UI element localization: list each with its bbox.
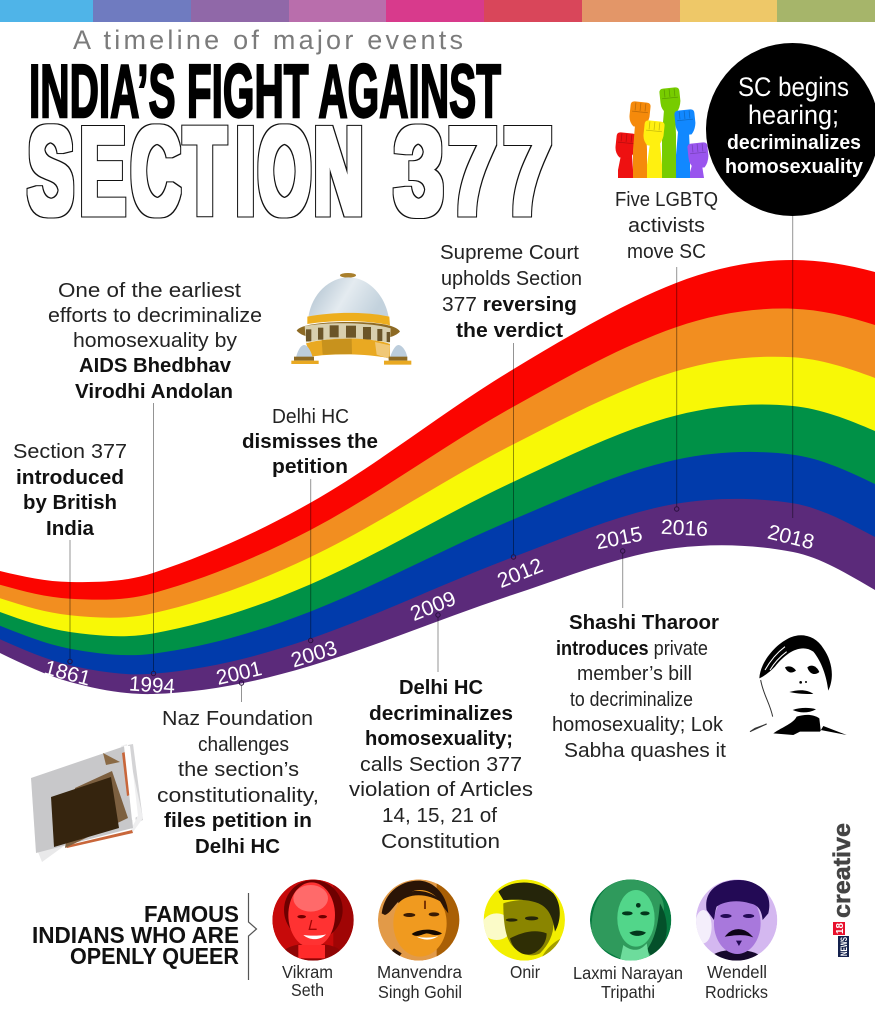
year labels — [42, 516, 816, 699]
event 1861 text: Section 377 — [13, 441, 127, 463]
name: Vikram Seth: Seth — [291, 980, 324, 1000]
year labels: 2016 — [660, 516, 709, 541]
event 2015 text: to decriminalize — [570, 689, 693, 711]
event 2009 text — [349, 677, 533, 853]
event 1861 text — [13, 441, 127, 540]
event 2001 text: files petition in — [164, 810, 312, 832]
event 2001 text: Naz Foundation — [162, 708, 313, 730]
name: Vikram Seth: Vikram — [282, 962, 333, 982]
event 2009 text: calls Section 377 — [360, 754, 522, 776]
portrait: Laxmi Narayan Tripathi — [590, 879, 671, 961]
portrait: Manvendra Singh Gohil — [378, 877, 463, 963]
icon: stack of petition papers — [31, 744, 143, 862]
event 2016 text — [615, 189, 718, 263]
event 2015 text: homosexuality; Lok — [552, 714, 724, 736]
year labels: 2018 — [765, 521, 816, 554]
event 2003 text — [242, 406, 378, 478]
year labels: 1994 — [128, 672, 176, 699]
title: 377 — [394, 102, 553, 240]
event 2015 text: Sabha quashes it — [564, 740, 726, 762]
event 2001 text: Delhi HC — [195, 836, 280, 858]
logo: News18 Creative: NEWS — [839, 937, 849, 956]
event 2012 text: Supreme Court — [440, 242, 579, 264]
event 1861 text: India — [46, 518, 95, 540]
event 2012 text: upholds Section — [441, 268, 582, 290]
year labels: 2001 — [214, 657, 264, 690]
event 1994 text: Virodhi Andolan — [75, 381, 233, 403]
portrait: Onir — [482, 879, 565, 961]
subtitle: A timeline of major events — [73, 25, 463, 55]
event 2012 text: 377 reversing — [442, 294, 577, 316]
rainbow timeline wave — [0, 260, 875, 700]
heading: famous Indians: OPENLY QUEER — [70, 943, 239, 969]
event 2016 text: activists — [628, 215, 705, 237]
event 2018 black circle callout — [706, 43, 875, 216]
event 2015 text: Shashi Tharoor — [569, 612, 719, 634]
event 1994 text: efforts to decriminalize — [48, 305, 262, 327]
title: SECTION — [28, 102, 363, 241]
logo: News18 Creative — [829, 823, 856, 957]
name: Laxmi Narayan Tripathi: Tripathi — [601, 982, 655, 1002]
event 2001 text: challenges — [198, 734, 289, 756]
event 1994 text: One of the earliest — [58, 280, 241, 302]
icon: Supreme Court dome — [291, 273, 411, 365]
event 1994 text: homosexuality by — [73, 330, 237, 352]
year labels: 1861 — [42, 656, 93, 691]
event 2018 black circle callout: hearing; — [748, 100, 839, 130]
name: Laxmi Narayan Tripathi: Laxmi Narayan — [573, 963, 683, 983]
name: Onir: Onir — [510, 962, 540, 982]
event 2009 text: 14, 15, 21 of — [382, 805, 497, 827]
event 2009 text: decriminalizes — [369, 703, 513, 725]
event 2001 text: constitutionality, — [157, 785, 319, 807]
connector lines and dots — [68, 216, 793, 702]
bracket arrow — [248, 893, 256, 980]
name: Laxmi Narayan Tripathi — [573, 963, 683, 1002]
year labels: 2015 — [594, 523, 644, 554]
event 1994 text: AIDS Bhedbhav — [79, 355, 232, 377]
portrait: Wendell Rodricks — [695, 879, 777, 961]
event 2009 text: Constitution — [381, 831, 500, 853]
event 2012 text — [440, 242, 582, 342]
name: Wendell Rodricks: Wendell — [707, 962, 767, 982]
event 2015 text: introduces private — [556, 638, 708, 660]
name: Manvendra Singh Gohil — [377, 962, 462, 1002]
event 2018 black circle callout: decriminalizes — [727, 132, 861, 154]
event 2015 text — [552, 612, 726, 762]
event 2016 text: Five LGBTQ — [615, 189, 718, 211]
icon: Shashi Tharoor portrait sketch — [750, 635, 847, 735]
event 2003 text: petition — [272, 456, 348, 478]
event 2016 text: move SC — [627, 241, 706, 263]
logo: News18 Creative: creative — [829, 823, 856, 918]
event 2012 text: the verdict — [456, 320, 563, 342]
year labels: 2009 — [407, 587, 459, 626]
event 2003 text: dismisses the — [242, 431, 378, 453]
event 2015 text: member’s bill — [577, 663, 692, 685]
name: Wendell Rodricks: Rodricks — [705, 982, 768, 1002]
name: Manvendra Singh Gohil: Manvendra — [377, 962, 462, 982]
top colour bar — [0, 0, 875, 22]
title — [28, 49, 553, 241]
heading: famous Indians: FAMOUS — [144, 901, 239, 927]
event 2001 text: the section’s — [178, 759, 299, 781]
event 2001 text — [157, 708, 319, 858]
event 2009 text: violation of Articles — [349, 779, 533, 801]
icon: raised rainbow fists — [614, 87, 710, 178]
event 1861 text: introduced — [16, 467, 124, 489]
heading: famous Indians — [32, 901, 239, 969]
event 2018 black circle callout: homosexuality — [725, 156, 864, 178]
event 2009 text: Delhi HC — [399, 677, 483, 699]
event 2003 text: Delhi HC — [272, 406, 349, 428]
event 1994 text — [48, 280, 262, 403]
event 1861 text: by British — [23, 492, 117, 514]
heading: famous Indians: INDIANS WHO ARE — [32, 922, 239, 948]
event 2009 text: homosexuality; — [365, 728, 513, 750]
name: Wendell Rodricks — [705, 962, 768, 1002]
name: Manvendra Singh Gohil: Singh Gohil — [378, 982, 462, 1002]
portrait: Vikram Seth — [272, 879, 357, 961]
logo: News18 Creative: 18 — [835, 923, 846, 934]
year labels: 2003 — [288, 637, 340, 672]
event 2018 black circle callout: SC begins — [738, 72, 849, 102]
name: Vikram Seth — [282, 962, 333, 1000]
year labels: 2012 — [494, 554, 546, 593]
